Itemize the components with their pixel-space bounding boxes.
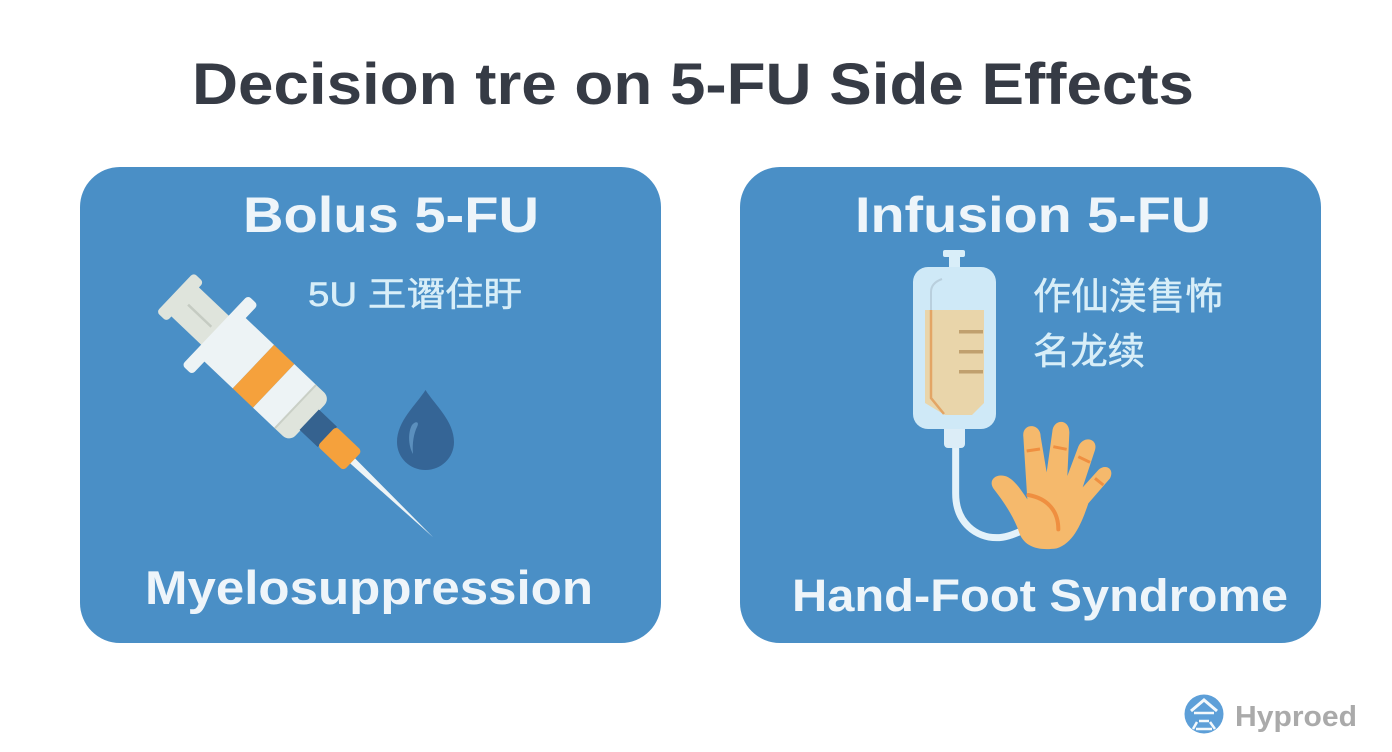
logo icon [1184,694,1224,734]
label: bolus note: 5U 王谮住盱 [308,276,522,314]
icon: blood drop [397,390,454,470]
panel: bolus 5-FU [80,167,661,643]
label: infusion note [1033,276,1223,372]
panel background [740,167,1321,643]
icon: IV bag [913,250,996,448]
heading: bolus: Bolus 5-FU [243,187,539,243]
icon: syringe [142,258,466,572]
panel background [80,167,661,643]
icon: IV tube [956,445,1022,538]
label: myelosuppression: Myelosuppression [145,561,593,614]
label: infusion note: 名龙续 [1033,331,1145,372]
title: Decision tre on 5-FU Side Effects [192,52,1194,117]
logo: Hyproed [1184,694,1357,734]
heading: infusion: Infusion 5-FU [855,187,1211,243]
label: infusion note: 作仙渼售怖 [1033,276,1223,317]
label: hand-foot syndrome: Hand-Foot Syndrome [792,570,1288,621]
logo wordmark: Hyproed [1235,701,1357,733]
panel: infusion 5-FU [740,167,1321,643]
icon: hand [992,422,1111,549]
